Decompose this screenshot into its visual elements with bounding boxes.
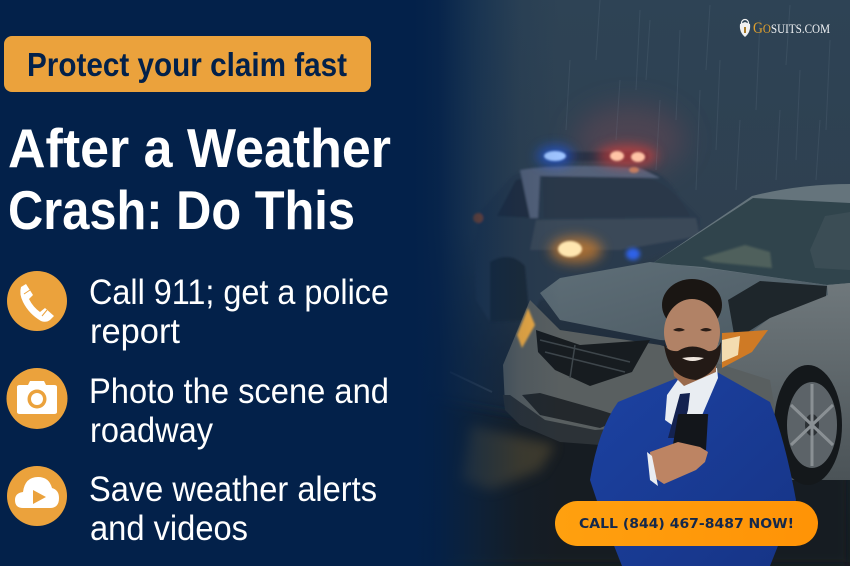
windshield bbox=[653, 198, 850, 285]
rain streaks bbox=[566, 0, 830, 190]
lower grille bbox=[522, 393, 625, 428]
logo wordmark: GOSUITS.COM bbox=[753, 20, 830, 37]
attorney holding a phone bbox=[590, 279, 796, 566]
step 3 text: Save weather alerts bbox=[89, 470, 377, 509]
step 2 text: Photo the scene and bbox=[89, 372, 389, 411]
badge: protect your claim fast bbox=[4, 36, 371, 92]
front bumper bbox=[503, 300, 775, 445]
step 2: photograph the scene bbox=[6, 368, 399, 450]
step 3 text: and videos bbox=[90, 509, 248, 548]
beard bbox=[664, 342, 721, 380]
damaged grille bbox=[536, 330, 650, 386]
police headlight bbox=[550, 237, 640, 263]
left headlight bbox=[517, 308, 535, 348]
badge label: Protect your claim fast bbox=[27, 46, 347, 83]
icon: camera bbox=[6, 368, 68, 429]
step 2 text: roadway bbox=[90, 411, 213, 450]
eyes bbox=[673, 328, 712, 332]
left fade into navy bbox=[414, 0, 560, 566]
title: Crash: Do This bbox=[8, 179, 355, 241]
icon: phone bbox=[7, 271, 67, 331]
car roof and cabin bbox=[650, 184, 850, 290]
necktie bbox=[668, 393, 690, 438]
police light bar bbox=[537, 145, 657, 173]
hand bbox=[650, 442, 708, 484]
suit jacket bbox=[590, 372, 796, 566]
head hair bbox=[662, 279, 722, 331]
shirt cuff bbox=[647, 452, 658, 486]
crumpled hood opening bbox=[728, 281, 827, 340]
red glow in the rain bbox=[575, 105, 685, 175]
side body bbox=[640, 283, 850, 480]
shirt collar bbox=[665, 368, 718, 425]
wrecked car bbox=[503, 184, 850, 485]
icon: cloud play bbox=[7, 466, 67, 526]
logo shield icon bbox=[740, 20, 750, 37]
neck bbox=[672, 360, 716, 386]
photo: rainy crash scene bbox=[414, 0, 850, 566]
photo backdrop bbox=[415, 0, 850, 566]
step 1 text: report bbox=[90, 312, 180, 351]
button background bbox=[555, 501, 818, 546]
smartphone bbox=[672, 414, 708, 450]
wet road with reflected light bbox=[430, 372, 850, 566]
face bbox=[664, 299, 720, 365]
step 1: call 911 bbox=[7, 271, 399, 351]
police car bbox=[473, 166, 700, 322]
smile bbox=[682, 357, 704, 361]
title bbox=[8, 117, 391, 241]
hood bbox=[540, 262, 828, 345]
front wheel bbox=[774, 365, 842, 485]
title: After a Weather bbox=[8, 117, 391, 179]
badge background bbox=[4, 36, 371, 92]
logo: GoSuits.com bbox=[740, 20, 830, 37]
right headlight bbox=[722, 330, 768, 368]
step 1 text: Call 911; get a police bbox=[89, 273, 389, 312]
button label: CALL (844) 467-8487 NOW! bbox=[579, 516, 794, 532]
call to action button bbox=[555, 501, 818, 546]
step 3: save alerts and videos bbox=[7, 466, 387, 548]
